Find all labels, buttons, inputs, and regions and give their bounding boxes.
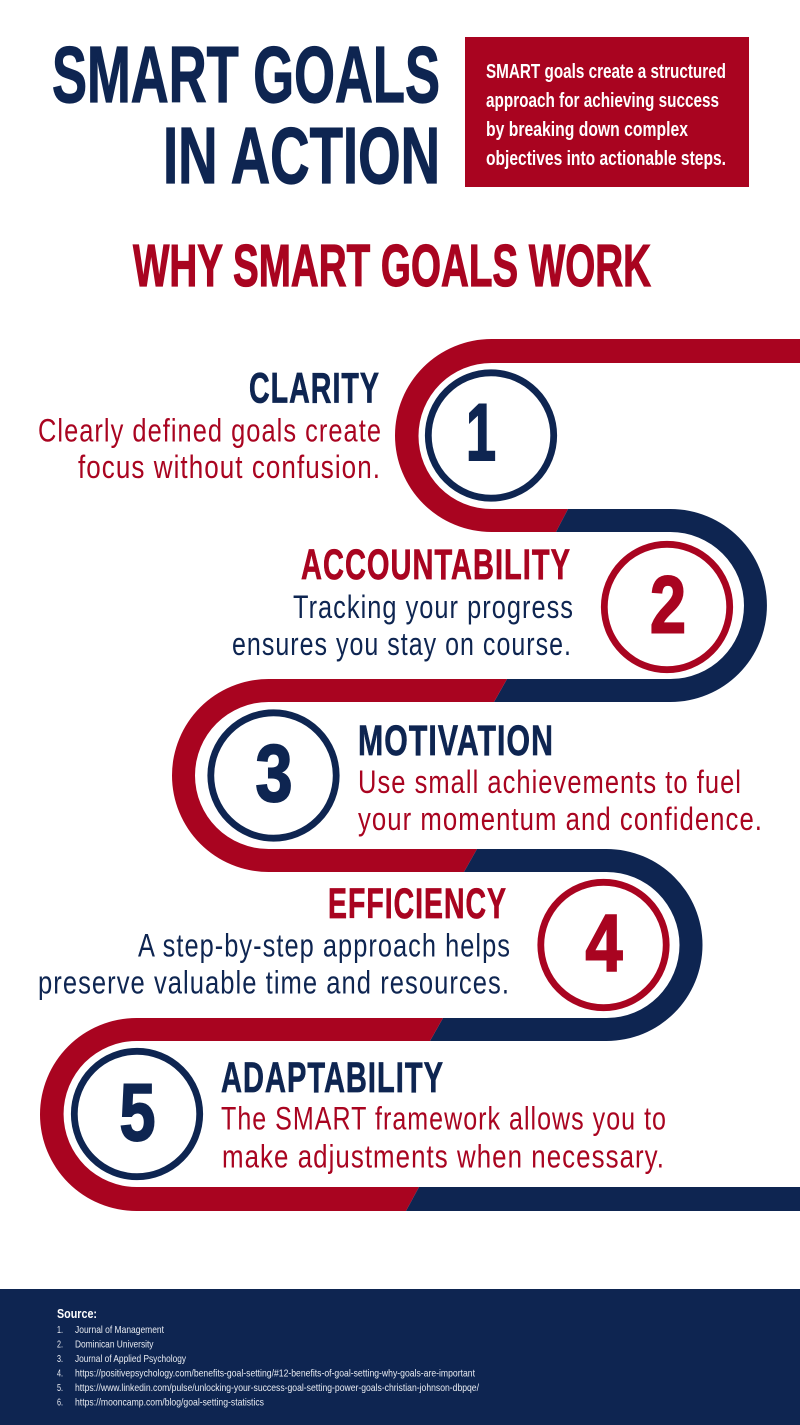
motivation text: MOTIVATION <box>358 718 554 765</box>
clarity text: focus without confusion. <box>78 449 381 485</box>
step 2: accountability <box>232 542 730 670</box>
source list <box>57 1324 479 1408</box>
clarity text: Clearly defined goals create <box>38 412 382 448</box>
clarity text <box>38 366 382 485</box>
intro callout box: approach for achieving success <box>486 90 719 112</box>
accountability text: ACCOUNTABILITY <box>301 542 571 589</box>
source list: Journal of Applied Psychology <box>75 1353 187 1365</box>
source list: 5. <box>57 1382 63 1394</box>
number badge 2 <box>604 544 730 670</box>
number badge 5 <box>74 1051 200 1177</box>
source list: 4. <box>57 1368 63 1380</box>
source list: Journal of Management <box>75 1324 164 1336</box>
step 3: motivation <box>211 713 763 838</box>
number badge 5: 5 <box>120 1068 156 1158</box>
source heading: Source: <box>57 1306 97 1321</box>
efficiency text: preserve valuable time and resources. <box>38 964 510 1000</box>
number badge 1 <box>428 373 554 498</box>
motivation text <box>358 718 763 837</box>
number badge 3: 3 <box>256 729 292 819</box>
step 4: efficiency <box>38 881 666 1008</box>
title: IN ACTION <box>163 111 440 200</box>
title <box>52 30 440 200</box>
source list: 3. <box>57 1353 63 1365</box>
winding ribbon path <box>40 339 800 1211</box>
adaptability text <box>221 1055 667 1174</box>
intro callout box <box>465 37 749 187</box>
source list: https://www.linkedin.com/pulse/unlocking-your-success-goal-setting-power-goals-christian-johnson-dbpqe/ <box>75 1382 479 1394</box>
source list: 2. <box>57 1338 63 1350</box>
source list: Dominican University <box>75 1338 154 1350</box>
number badge 2: 2 <box>650 560 686 650</box>
step 5: adaptability <box>74 1051 667 1177</box>
footer: sources <box>0 1289 800 1425</box>
source list: 1. <box>57 1324 63 1336</box>
intro callout box: by breaking down complex <box>486 119 688 141</box>
efficiency text <box>38 881 511 1000</box>
number badge 1: 1 <box>466 388 496 478</box>
adaptability text: ADAPTABILITY <box>221 1055 444 1102</box>
accountability text <box>232 542 574 662</box>
source list: 6. <box>57 1396 63 1408</box>
number badge 4: 4 <box>586 899 622 989</box>
number badge 3 <box>211 713 336 838</box>
accountability text: Tracking your progress <box>293 589 574 625</box>
title: SMART GOALS <box>52 30 440 119</box>
efficiency text: EFFICIENCY <box>328 881 507 928</box>
clarity text: CLARITY <box>249 366 380 412</box>
step 1: clarity <box>38 366 554 498</box>
accountability text: ensures you stay on course. <box>232 626 572 662</box>
intro callout box: objectives into actionable steps. <box>486 148 726 170</box>
number badge 4 <box>541 882 666 1008</box>
source list: https://positivepsychology.com/benefits-goal-setting/#12-benefits-of-goal-setting-why-goals-are-important <box>75 1368 475 1380</box>
intro callout box: SMART goals create a structured <box>486 61 726 83</box>
adaptability text: The SMART framework allows you to <box>221 1100 667 1136</box>
source list: https://mooncamp.com/blog/goal-setting-statistics <box>75 1396 264 1408</box>
adaptability text: make adjustments when necessary. <box>222 1138 665 1174</box>
efficiency text: A step-by-step approach helps <box>138 928 511 964</box>
